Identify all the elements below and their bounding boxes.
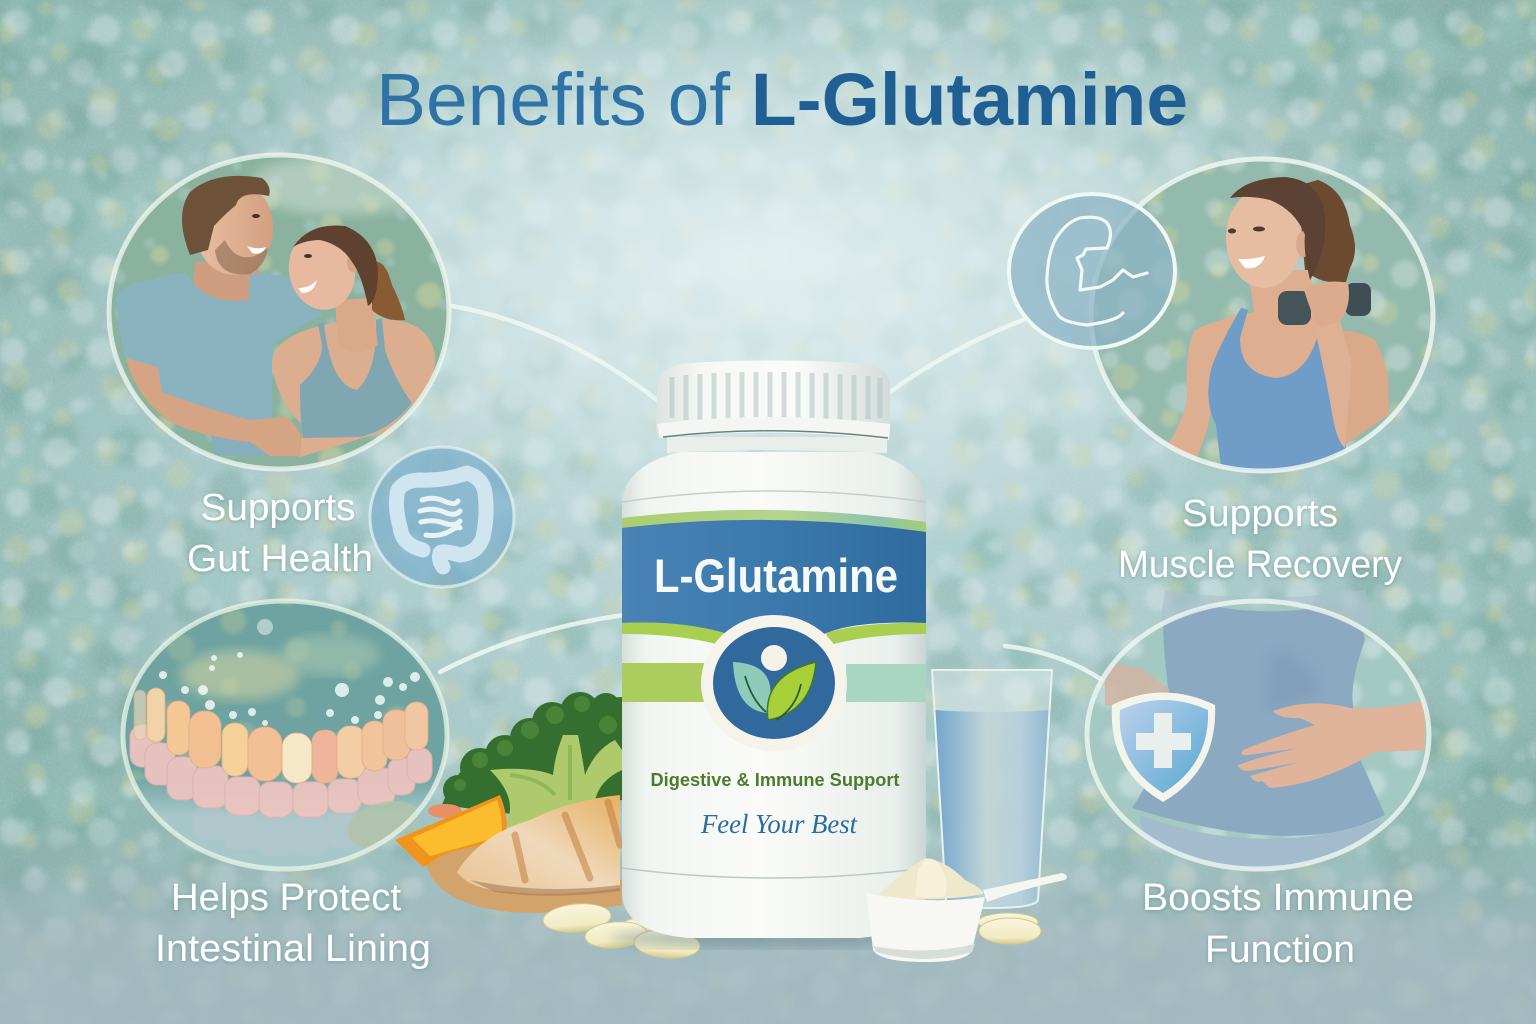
icon: orange xyxy=(395,795,507,867)
icon: broccoli xyxy=(442,692,622,827)
bottle cap xyxy=(656,360,890,440)
text: supports muscle recovery: Supports xyxy=(1182,493,1338,535)
icon: capsules xyxy=(542,901,701,960)
panel: couple photo circle xyxy=(100,150,460,480)
bottle neck xyxy=(667,437,887,453)
icon: chicken xyxy=(457,795,620,896)
lining background xyxy=(132,604,432,869)
panel: immune torso circle xyxy=(1085,590,1435,870)
back arm xyxy=(1105,663,1170,706)
text: helps protect intestinal lining: Intestinal Lining xyxy=(155,928,431,970)
icon: muscle xyxy=(1009,194,1175,348)
couple photo background xyxy=(112,158,446,464)
immune background xyxy=(1096,604,1420,839)
panel: intestinal lining circle xyxy=(120,600,450,870)
text: boosts immune function xyxy=(1142,877,1414,971)
icon: plate xyxy=(427,845,622,913)
shoulder seam xyxy=(622,491,926,502)
connector lines xyxy=(440,306,1102,680)
icon: capsules under scoop xyxy=(978,913,1041,944)
text: helps protect intestinal lining xyxy=(155,877,431,970)
dumbbell xyxy=(1278,283,1371,325)
bottle script slogan: Feel Your Best xyxy=(700,809,858,839)
woman figure xyxy=(1163,177,1389,475)
title: Benefits of L-Glutamine xyxy=(376,58,1188,141)
bottom seam xyxy=(622,868,926,878)
man xyxy=(116,176,322,456)
text: helps protect intestinal lining: Helps Protect xyxy=(171,877,401,919)
icon: powder scoop xyxy=(866,858,1067,962)
villi fingers xyxy=(134,688,428,783)
text: supports muscle recovery: Muscle Recovery xyxy=(1118,544,1402,586)
woman xyxy=(272,225,435,457)
food group xyxy=(395,692,701,960)
label bands xyxy=(622,510,926,702)
hand on stomach xyxy=(1238,700,1425,788)
text: supports gut health xyxy=(187,487,373,580)
bottle xyxy=(610,360,940,948)
text: supports muscle recovery xyxy=(1118,493,1402,586)
hand gripping dumbbell xyxy=(1304,282,1349,327)
bottle body xyxy=(622,452,926,938)
faded torso above circle xyxy=(1160,590,1375,625)
bottle logo xyxy=(701,615,847,751)
panel: woman with dumbbell circle xyxy=(1085,150,1440,480)
icon: glass of water xyxy=(932,670,1052,908)
torso xyxy=(1132,600,1385,870)
villi reflection xyxy=(193,808,361,855)
text: supports gut health: Gut Health xyxy=(187,538,373,580)
text: supports gut health: Supports xyxy=(200,487,356,529)
text: boosts immune function: Function xyxy=(1205,929,1355,971)
bottle shadow xyxy=(610,928,940,948)
icon: shield xyxy=(1112,692,1215,802)
icon: gut xyxy=(370,447,514,587)
villi lower base xyxy=(130,725,432,817)
pebble xyxy=(348,801,417,848)
bottle tagline: Digestive & Immune Support xyxy=(650,769,900,790)
text: boosts immune function: Boosts Immune xyxy=(1142,877,1414,919)
dumbbell woman background xyxy=(1094,162,1430,464)
bottle label title: L-Glutamine xyxy=(654,549,898,602)
